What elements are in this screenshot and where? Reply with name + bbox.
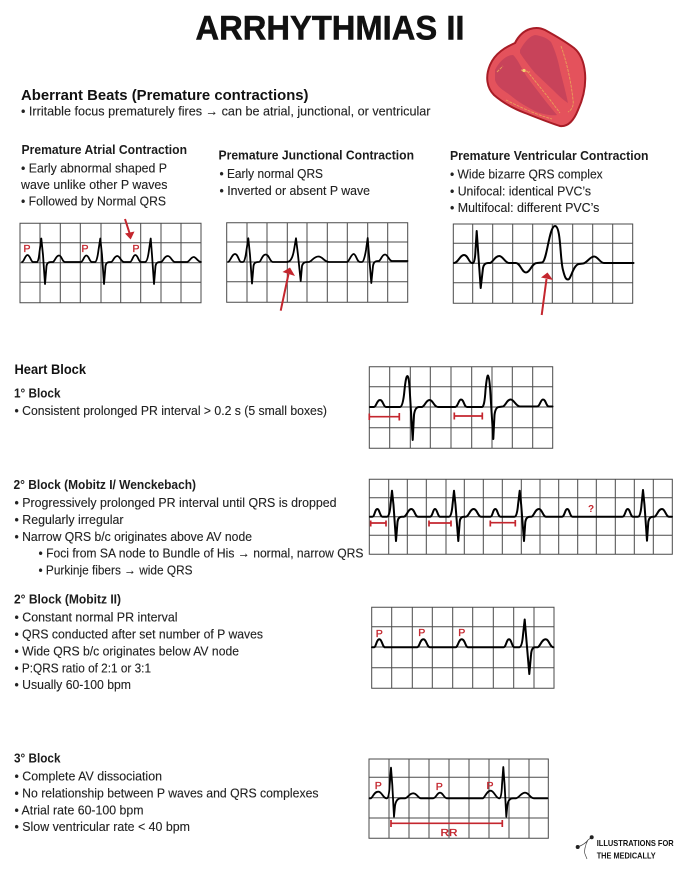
chart: ECG atrial: P: [132, 243, 140, 255]
chart: ECG third degree: [369, 759, 548, 839]
chart: ECG ventricular: [453, 224, 634, 303]
chart: ECG Mobitz II: P: [418, 627, 425, 639]
heading: 2° Block (Mobitz II): [14, 592, 121, 606]
panel: premature atrial contraction: [20, 143, 201, 303]
panel: third degree block: [14, 751, 548, 839]
text block: • Foci from SA node to Bundle of His → normal, narrow QRS: [38, 546, 364, 561]
chart: ECG third degree: RR: [440, 827, 458, 839]
arrow: premature P wave: [125, 219, 134, 240]
text: aberrant beats description: • Irritable focus prematurely fires → can be atrial, junctional, or ventricular: [21, 104, 431, 119]
text block: • QRS conducted after set number of P waves: [14, 627, 263, 642]
chart: ECG Mobitz II: P: [458, 627, 465, 639]
section: aberrant beats: [21, 87, 431, 119]
text block: • Multifocal: different PVC’s: [450, 200, 600, 215]
chart: ECG third degree: P: [436, 781, 443, 793]
text block: • Constant normal PR interval: [14, 610, 178, 625]
heading: 1° Block: [14, 386, 61, 400]
text block: [14, 768, 319, 834]
text block: [14, 610, 263, 692]
chart: ECG third degree: P: [486, 780, 494, 792]
text block: • Wide QRS b/c originates below AV node: [14, 644, 239, 659]
text block: • Followed by Normal QRS: [21, 194, 166, 209]
text block: [220, 166, 370, 198]
text block: • Wide bizarre QRS complex: [450, 166, 603, 181]
arrow: premature QRS: [281, 268, 295, 311]
text block: wave unlike other P waves: [20, 177, 168, 192]
chart: ECG atrial: [20, 223, 201, 303]
title: ARRHYTHMIAS II: [196, 9, 464, 47]
chart: ECG Mobitz II: P: [376, 628, 383, 640]
arrow: PVC: [541, 272, 553, 315]
text block: • No relationship between P waves and QRS complexes: [14, 785, 319, 800]
chart: ECG first degree: [369, 367, 553, 448]
text block: • Early normal QRS: [220, 166, 323, 181]
text block: • Consistent prolonged PR interval > 0.2 s (5 small boxes): [14, 403, 327, 418]
panel: second degree Mobitz I: [14, 478, 672, 577]
icon: heart cross-section: [487, 28, 585, 126]
chart: ECG atrial: P: [82, 243, 89, 255]
heading: 2° Block (Mobitz I/ Wenckebach): [14, 478, 196, 492]
text block: • Atrial rate 60-100 bpm: [14, 802, 144, 817]
chart: ECG junctional: [227, 223, 408, 302]
panel: first degree block: [14, 367, 553, 448]
text block: • Unifocal: identical PVC’s: [450, 183, 591, 198]
heading: aberrant beats: Aberrant Beats (Premature contractions): [21, 87, 309, 104]
text block: • P:QRS ratio of 2:1 or 3:1: [14, 660, 151, 675]
panel: premature junctional contraction: [218, 149, 414, 311]
logo: illustrations for the medically: [576, 835, 674, 860]
chart: ECG atrial: P: [24, 243, 31, 255]
heading: Premature Junctional Contraction: [218, 149, 414, 163]
chart: ECG Mobitz I: ?: [588, 504, 594, 515]
chart: ECG Mobitz I: [369, 479, 672, 554]
text block: • Early abnormal shaped P: [21, 160, 167, 175]
heading: 3° Block: [14, 751, 61, 765]
logo: illustrations for the medically: THE MEDICALLY: [597, 850, 656, 860]
heading: Premature Ventricular Contraction: [450, 149, 648, 163]
text block: [14, 495, 364, 577]
panel: premature ventricular contraction: [450, 149, 648, 315]
panel: second degree Mobitz II: [14, 592, 554, 692]
chart: ECG Mobitz II: [372, 607, 554, 688]
text block: • Slow ventricular rate < 40 bpm: [14, 819, 190, 834]
heading: Premature Atrial Contraction: [22, 143, 187, 157]
text block: • Complete AV dissociation: [14, 768, 162, 783]
text block: [450, 166, 603, 215]
chart: ECG third degree: P: [375, 780, 382, 792]
text block: • Inverted or absent P wave: [220, 183, 370, 198]
text block: • Usually 60-100 bpm: [14, 677, 131, 692]
text block: [20, 160, 168, 209]
text block: • Regularly irregular: [14, 512, 124, 527]
text block: • Progressively prolonged PR interval until QRS is dropped: [14, 495, 336, 510]
heading: heart block: Heart Block: [14, 362, 86, 377]
text block: • Purkinje fibers → wide QRS: [38, 562, 193, 577]
text block: • Narrow QRS b/c originates above AV node: [14, 529, 252, 544]
